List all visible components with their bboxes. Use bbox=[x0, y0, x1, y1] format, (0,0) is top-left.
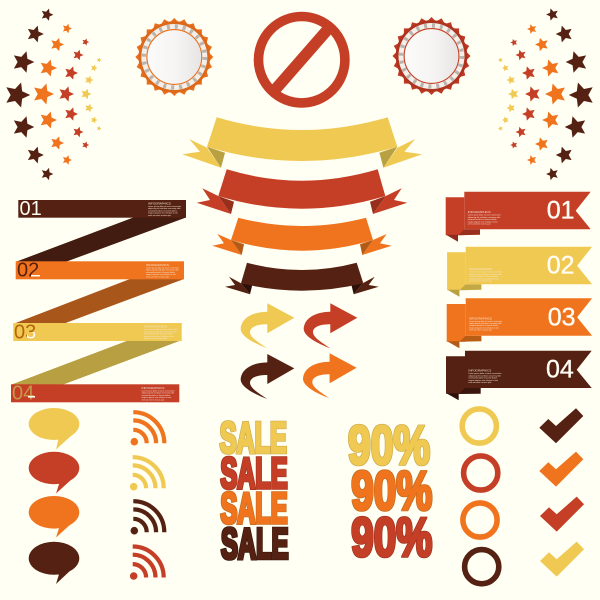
right ribbon 03: enim ad minim veniam quis bbox=[469, 330, 492, 332]
right ribbon 01 bbox=[446, 192, 591, 242]
bar 02: Lorem ipsum dolor sit amet consectetur bbox=[146, 266, 179, 270]
check mark: red bbox=[540, 497, 584, 532]
bar 04: INFOGRAPHICS bbox=[142, 386, 164, 390]
bar 04: Lorem ipsum dolor sit amet consectetur bbox=[142, 390, 175, 392]
check mark: dark brown bbox=[539, 408, 583, 443]
bar 04: magna aliquam erat volutpat ut wisi bbox=[142, 396, 172, 399]
speech bubble: orange bbox=[29, 496, 79, 538]
bar 01: magna aliquam erat volutpat ut wisi bbox=[148, 212, 178, 215]
right ribbon 01: INFOGRAPHICS bbox=[468, 210, 491, 214]
bar 01: enim ad minim veniam quis bbox=[148, 215, 171, 217]
right star burst bbox=[498, 8, 593, 180]
bar 04: euismod tincidunt ut laoreet dolore bbox=[142, 394, 170, 397]
right ribbon 01: Lorem ipsum dolor sit amet consectetur bbox=[468, 214, 501, 217]
right ribbon 02 bbox=[447, 247, 592, 297]
right ribbon 03 bbox=[447, 298, 592, 348]
bar 03: 03 bbox=[14, 322, 36, 344]
rss icon: orange bbox=[130, 412, 164, 446]
right ribbon 04: INFOGRAPHICS bbox=[468, 369, 491, 373]
orange rosette badge bbox=[135, 18, 213, 96]
speech bubble: dark brown bbox=[29, 542, 79, 584]
left zigzag numbered list bbox=[11, 198, 186, 404]
arrow: red bbox=[304, 303, 357, 348]
check mark: orange bbox=[539, 452, 583, 487]
right ribbon 02: euismod tincidunt ut laoreet dolore bbox=[469, 275, 498, 278]
speech bubble: red bbox=[29, 452, 79, 494]
right ribbon 04 bbox=[446, 351, 592, 400]
right ribbon 01: euismod tincidunt ut laoreet dolore bbox=[468, 218, 497, 221]
right ribbon 04: magna aliquam erat volutpat ut wisi bbox=[468, 379, 499, 382]
bar 01: adipiscing elit sed diam nonummy nibh bbox=[148, 207, 180, 210]
red ribbon banner bbox=[197, 169, 407, 214]
yellow ribbon banner bbox=[182, 117, 422, 168]
right ribbon 03: 03 bbox=[548, 303, 576, 331]
bar 03: enim ad minim veniam quis bbox=[144, 338, 167, 340]
percent text: red: 90% bbox=[351, 506, 432, 568]
bar 01 bbox=[18, 198, 186, 220]
right ribbon 02: INFOGRAPHICS bbox=[469, 267, 492, 271]
bar 01: euismod tincidunt ut laoreet dolore bbox=[148, 209, 177, 212]
right ribbon 03: adipiscing elit sed diam nonummy nibh bbox=[469, 322, 502, 325]
sale text: orange: SALE bbox=[220, 485, 288, 533]
bar 01: INFOGRAPHICS bbox=[148, 202, 171, 206]
right ribbon 03: Lorem ipsum dolor sit amet consectetur bbox=[469, 320, 503, 323]
zigzag band 3 bbox=[12, 341, 180, 384]
right ribbon 04: Lorem ipsum dolor sit amet consectetur bbox=[468, 372, 502, 375]
ring: dark brown bbox=[465, 550, 499, 584]
bar 04: 04 bbox=[12, 382, 34, 404]
bar 03: adipiscing elit sed diam nonummy nibh bbox=[144, 330, 176, 333]
right ribbon 03: euismod tincidunt ut laoreet dolore bbox=[469, 324, 498, 327]
right ribbon 02: enim ad minim veniam quis bbox=[469, 280, 492, 282]
arrow: yellow bbox=[241, 303, 294, 348]
prohibition sign bbox=[258, 16, 345, 103]
right ribbon 04: euismod tincidunt ut laoreet dolore bbox=[468, 377, 497, 380]
left star burst bbox=[6, 9, 102, 180]
right ribbon 01: enim ad minim veniam quis bbox=[468, 223, 491, 225]
arrow: dark brown bbox=[241, 354, 294, 399]
bar 01: Lorem ipsum dolor sit amet consectetur bbox=[148, 205, 181, 208]
rss icon: yellow bbox=[130, 457, 164, 490]
sale text: red: SALE bbox=[220, 450, 288, 498]
dark brown ribbon banner bbox=[225, 263, 379, 294]
percent text: orange: 90% bbox=[351, 460, 432, 522]
right ribbon 02: magna aliquam erat volutpat ut wisi bbox=[469, 277, 499, 280]
sale text: yellow: SALE bbox=[220, 414, 287, 462]
ring: yellow bbox=[462, 409, 496, 443]
bar 03: euismod tincidunt ut laoreet dolore bbox=[144, 333, 173, 336]
red rosette badge bbox=[392, 17, 471, 95]
right ribbon 03: INFOGRAPHICS bbox=[469, 316, 492, 320]
bar 02: enim ad minim veniam quis bbox=[146, 276, 169, 278]
orange ribbon banner bbox=[212, 218, 392, 255]
rss icon: red bbox=[130, 546, 164, 580]
ring: red bbox=[464, 456, 498, 490]
bar 02: adipiscing elit sed diam nonummy nibh bbox=[146, 269, 178, 272]
right ribbon 01: adipiscing elit sed diam nonummy nibh bbox=[468, 216, 500, 219]
bar 01: 01 bbox=[20, 198, 42, 220]
right ribbon 04: 04 bbox=[546, 356, 574, 384]
bar 02: euismod tincidunt ut laoreet dolore bbox=[146, 271, 175, 274]
bar 02 bbox=[16, 260, 184, 282]
speech bubble: yellow bbox=[29, 408, 79, 450]
ring: orange bbox=[463, 503, 497, 537]
zigzag band 1 bbox=[17, 218, 186, 262]
bar 03: 03 bbox=[14, 322, 36, 344]
right ribbon 04: adipiscing elit sed diam nonummy nibh bbox=[468, 374, 501, 377]
right ribbon 02: 02 bbox=[547, 251, 575, 279]
arrow: orange bbox=[303, 353, 357, 398]
bar 04: enim ad minim veniam quis bbox=[142, 399, 164, 401]
bar 03: Lorem ipsum dolor sit amet consectetur bbox=[144, 328, 177, 331]
rss icon: dark brown bbox=[130, 501, 164, 534]
bar 04: adipiscing elit sed diam nonummy nibh bbox=[142, 392, 174, 395]
right ribbon 01: 01 bbox=[547, 196, 575, 224]
bar 03: magna aliquam erat volutpat ut wisi bbox=[144, 335, 174, 338]
check mark: yellow bbox=[540, 542, 584, 577]
right ribbon 01: magna aliquam erat volutpat ut wisi bbox=[468, 220, 498, 223]
zigzag band 2 bbox=[15, 279, 184, 323]
right ribbon 03: magna aliquam erat volutpat ut wisi bbox=[469, 326, 499, 329]
bar 02: 02 bbox=[17, 260, 39, 282]
right ribbon 02: Lorem ipsum dolor sit amet consectetur bbox=[469, 271, 503, 274]
bar 04 bbox=[11, 382, 179, 404]
percent text: yellow: 90% bbox=[348, 414, 430, 476]
bar 03: INFOGRAPHICS bbox=[144, 325, 167, 329]
bar 03 bbox=[13, 323, 182, 341]
bar 02: magna aliquam erat volutpat ut wisi bbox=[146, 273, 176, 276]
bar 02: INFOGRAPHICS bbox=[146, 263, 169, 267]
right ribbon 04: enim ad minim veniam quis bbox=[468, 382, 491, 384]
sale text: dark brown: SALE bbox=[221, 520, 288, 568]
right ribbon 02: adipiscing elit sed diam nonummy nibh bbox=[469, 273, 502, 276]
